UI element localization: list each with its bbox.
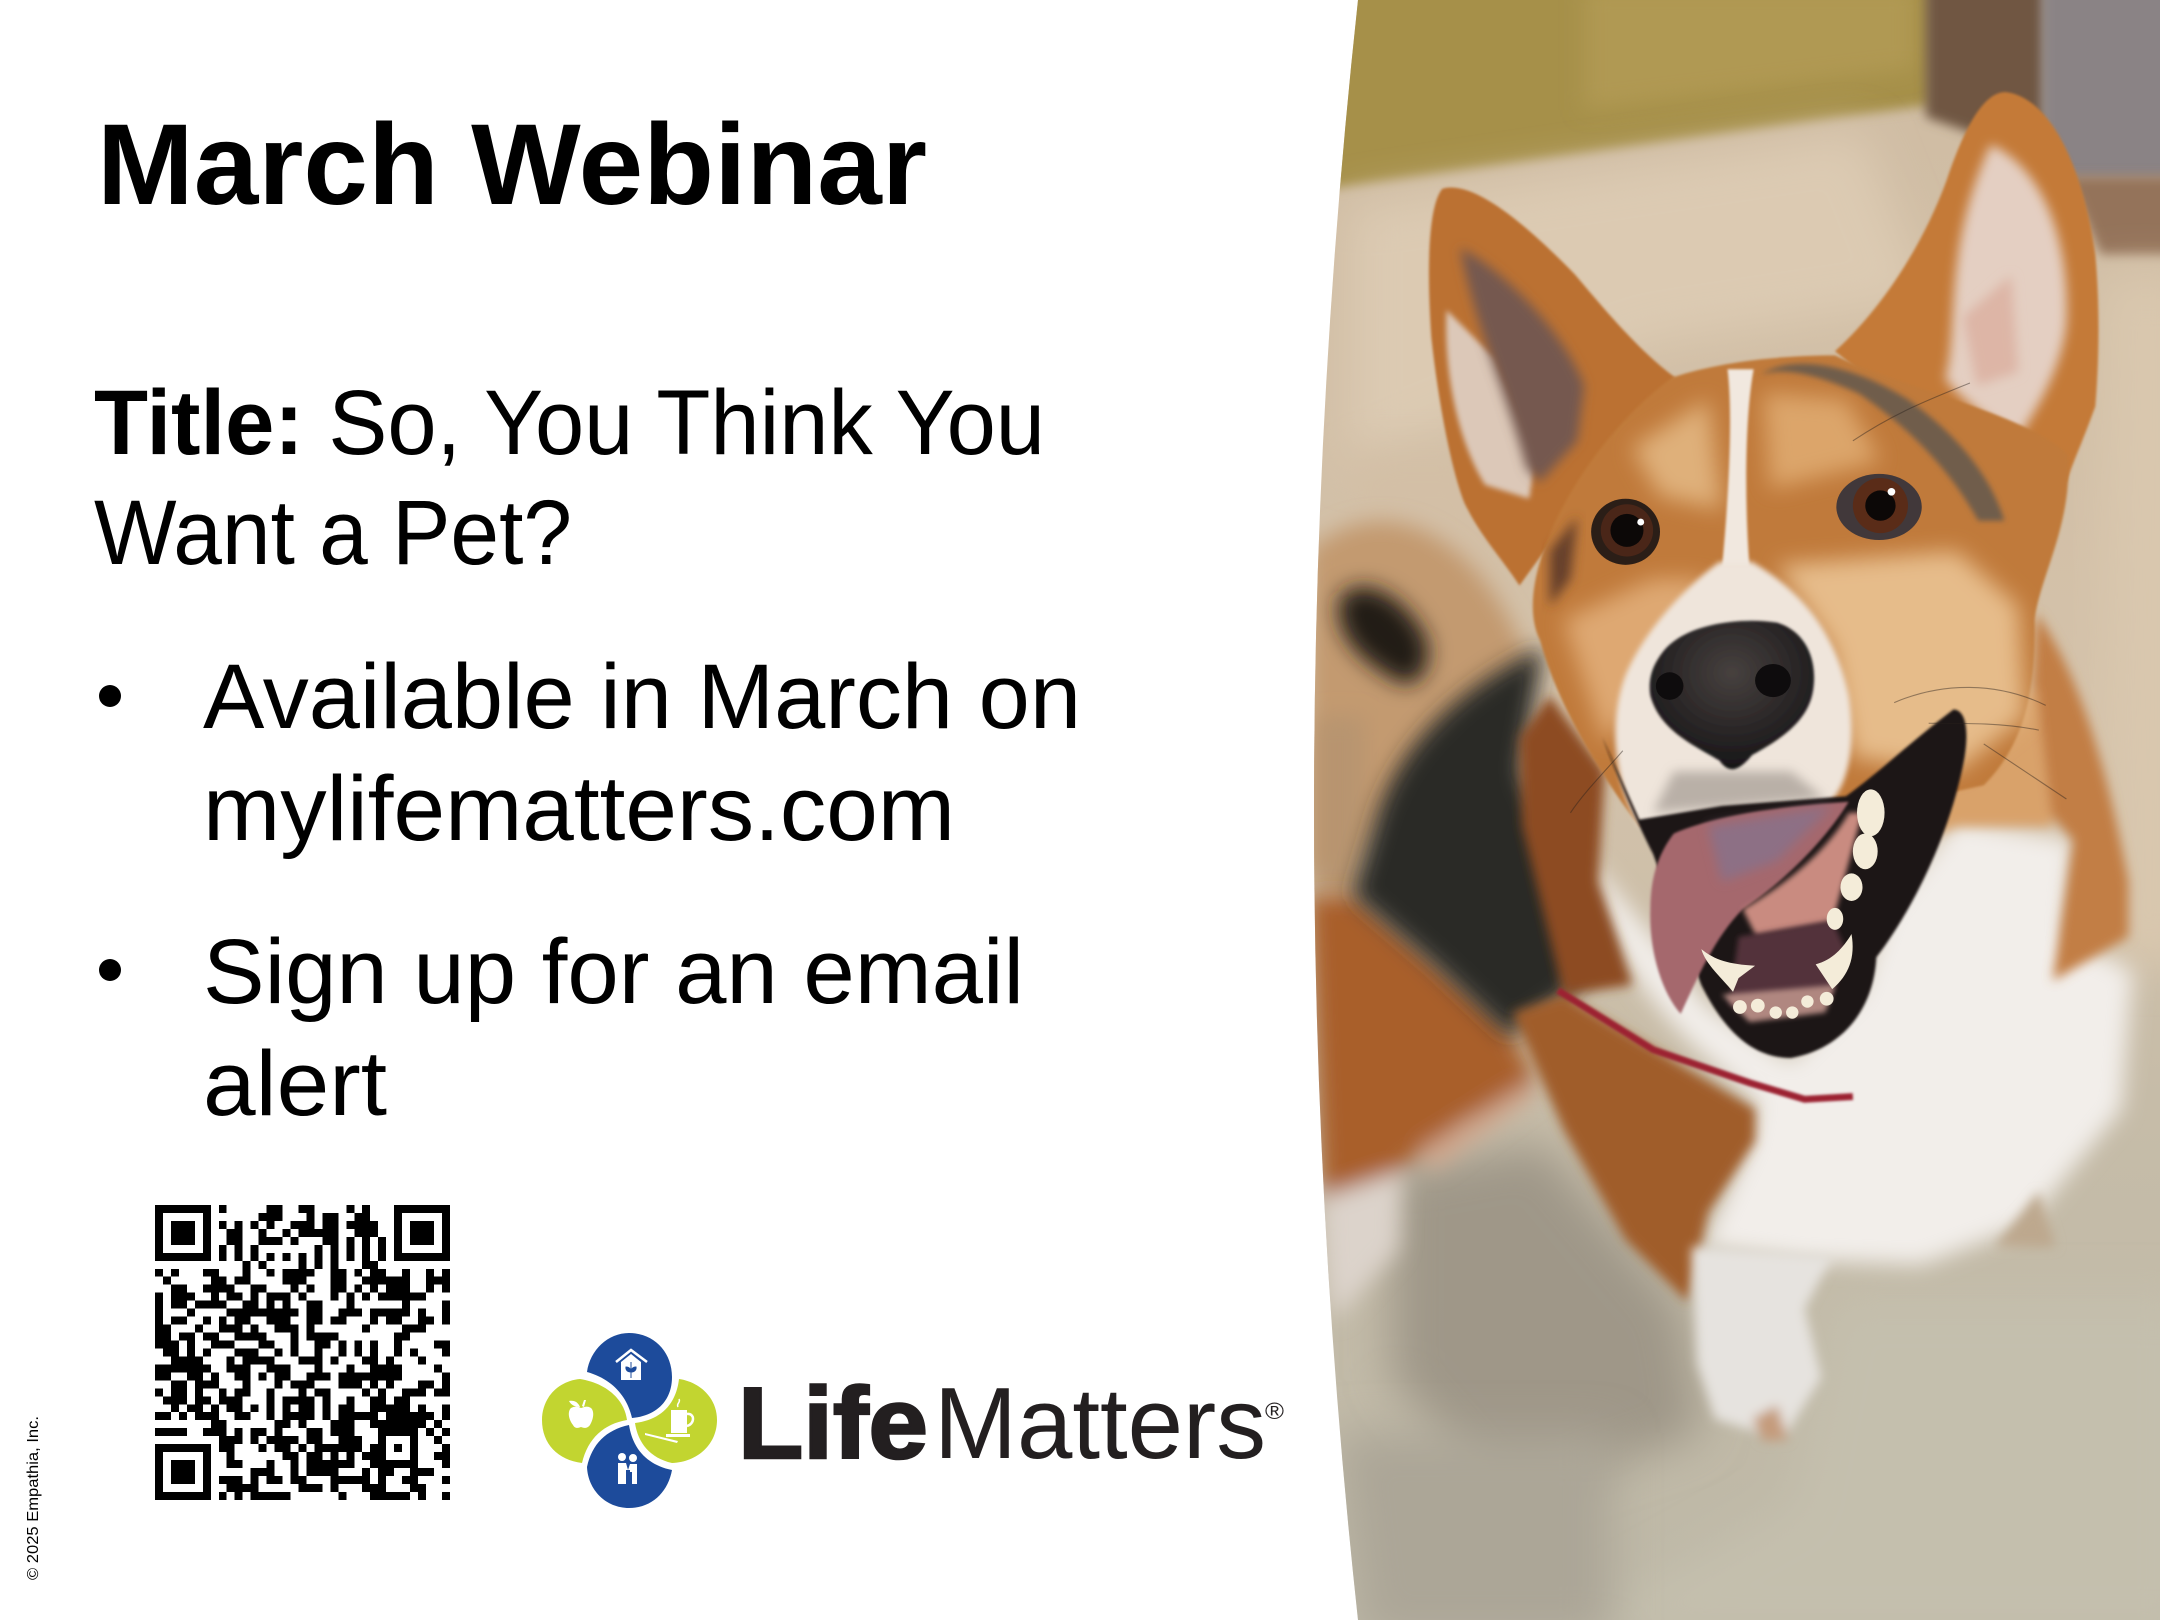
webinar title text bbox=[94, 372, 1045, 584]
icon: people bbox=[618, 1453, 637, 1484]
white blaze bbox=[1722, 369, 1754, 568]
bullet: available in March: Available in March on bbox=[203, 646, 1081, 748]
webinar title text: Want a Pet? bbox=[94, 482, 572, 584]
left ear bbox=[1429, 187, 1675, 585]
whiskers bbox=[1570, 383, 2066, 813]
white chest bbox=[1591, 820, 2133, 1265]
dark harness bbox=[1353, 647, 1605, 1036]
logo wordmark: ® bbox=[1265, 1398, 1284, 1424]
tail bbox=[1309, 521, 1529, 895]
bullet: available in March: mylifematters.com bbox=[203, 758, 955, 860]
hind leg bbox=[1309, 895, 1536, 1321]
title: March Webinar bbox=[97, 101, 927, 229]
neck and shoulder fur bbox=[1513, 613, 2128, 1302]
right eye bbox=[1836, 474, 1922, 540]
logo wordmark: Life bbox=[738, 1368, 928, 1480]
bullet: available in March bbox=[99, 646, 1081, 860]
logo wordmark bbox=[738, 1368, 1284, 1480]
icon: house bbox=[616, 1350, 647, 1380]
webinar title text: Title: So, You Think You bbox=[94, 372, 1045, 474]
front leg and paw bbox=[1692, 1192, 2055, 1441]
bullet: sign up: Sign up for an email bbox=[203, 921, 1024, 1023]
QR code bbox=[155, 1209, 450, 1496]
red collar bbox=[1558, 990, 1853, 1099]
bullet: sign up: alert bbox=[203, 1033, 387, 1135]
nose bbox=[1650, 621, 1814, 769]
photo background bbox=[1281, 0, 2160, 1620]
copyright: © 2025 Empathia, Inc. bbox=[25, 1416, 42, 1580]
icon: apple bbox=[569, 1400, 593, 1428]
left eye bbox=[1591, 499, 1660, 565]
head bbox=[1533, 355, 2068, 827]
icon: cup bbox=[645, 1399, 693, 1443]
right ear bbox=[1835, 92, 2099, 482]
bullet: sign up bbox=[99, 921, 1024, 1135]
logo bbox=[542, 1333, 1284, 1508]
photo: dog bbox=[1281, 0, 2160, 1620]
forehead markings bbox=[1550, 364, 2025, 771]
logo wordmark: Matters bbox=[934, 1368, 1266, 1480]
open mouth bbox=[1602, 709, 1966, 1058]
muzzle bbox=[1615, 562, 1851, 827]
teeth bbox=[1701, 789, 1885, 1019]
gums and inner mouth bbox=[1743, 813, 1863, 937]
tongue bbox=[1650, 802, 1849, 1014]
logo mark bbox=[542, 1333, 717, 1508]
